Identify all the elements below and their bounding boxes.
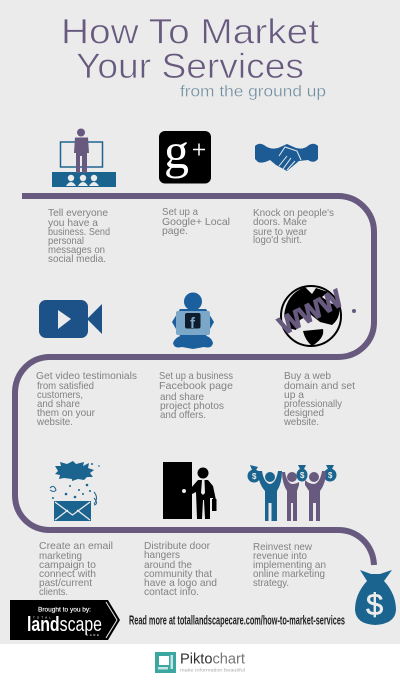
text: step 9 <box>253 542 326 589</box>
text: step 9: implementing an <box>253 560 326 571</box>
title: How To Market <box>61 12 319 52</box>
text: step 4: website. <box>36 417 73 428</box>
icon: three people with money bags: $ <box>252 472 257 481</box>
text: step 4: and share <box>37 399 80 410</box>
text: step 1: messages on <box>48 245 105 256</box>
text: step 6: professionally <box>284 399 343 410</box>
text: step 8: around the <box>144 560 192 571</box>
text: step 7 <box>39 541 113 598</box>
text: step 9: Reinvest new <box>253 542 312 553</box>
icon: email with burst <box>50 461 100 521</box>
text: step 3: Knock on people's <box>253 208 334 219</box>
text: step 7: Create an email <box>39 541 113 552</box>
text: step 6: website. <box>283 417 319 428</box>
text: step 4: from satisfied <box>37 381 94 392</box>
Piktochart logo: Piktochart <box>180 652 245 668</box>
icon: video camera <box>39 300 102 338</box>
text: step 2: Google+ Local <box>162 217 230 228</box>
text: step 5: and share <box>160 392 204 403</box>
icon: three people with money bags <box>248 465 336 521</box>
text: step 6 <box>283 371 355 428</box>
text: step 3: doors. Make <box>253 217 307 228</box>
text: step 6: designed <box>284 408 324 419</box>
text: step 4: them on your <box>37 408 96 419</box>
icon: three people with money bags: $ <box>328 471 333 480</box>
icon: Google+: g <box>164 123 189 179</box>
text: step 5: Set up a business <box>159 371 233 382</box>
text: step 4 <box>36 371 137 428</box>
text: step 7: clients. <box>39 587 68 598</box>
badge: brought to you by: Brought to you by: <box>38 606 91 614</box>
icon: presenter <box>52 128 116 187</box>
text: step 1: you have a <box>48 218 98 229</box>
text: step 6: domain and set <box>284 381 355 392</box>
text: step 8: Distribute door <box>144 541 211 552</box>
text: step 3: logo'd shirt. <box>253 235 302 246</box>
badge: brought to you by: landscape <box>27 614 102 636</box>
text: step 8: have a logo and <box>144 578 217 589</box>
icon: money bag <box>355 570 396 625</box>
badge: brought to you by: TOTAL <box>33 616 51 620</box>
icon: money bag: $ <box>366 587 383 622</box>
icon: three people with money bags: $ <box>300 471 305 480</box>
text: step 1: business. Send <box>48 227 110 238</box>
text: step 2: Set up a <box>162 207 198 218</box>
text: step 1 <box>48 208 110 265</box>
text: step 8: contact info. <box>144 587 199 598</box>
text: step 5: project photos <box>160 401 224 412</box>
text: step 7: campaign to <box>39 560 96 571</box>
text: step 5: Facebook page <box>159 381 233 392</box>
title: Your Services <box>76 47 304 86</box>
text: step 5 <box>159 371 233 421</box>
icon: Google+ <box>159 123 211 184</box>
winding path <box>15 196 374 565</box>
text: step 3: sure to wear <box>253 227 307 238</box>
text: step 4: customers, <box>37 390 83 401</box>
icon: person with laptop <box>172 292 214 349</box>
text: step 2: page. <box>162 226 188 237</box>
title <box>61 12 319 86</box>
text: step 9: revenue into <box>253 551 307 562</box>
text: step 7: past/current <box>39 578 92 589</box>
text: step 6: Buy a web <box>284 371 331 382</box>
text: step 5: and offers. <box>160 410 206 421</box>
icon: door and businessman <box>163 462 216 519</box>
text: step 8: community that <box>144 569 212 580</box>
subtitle: from the ground up <box>180 84 326 100</box>
icon: handshake <box>255 144 318 171</box>
text: step 4: Get video testimonials <box>36 371 137 382</box>
badge: brought to you by: CARE <box>86 633 99 637</box>
Piktochart logo: make information beautiful <box>180 668 245 672</box>
Piktochart logo <box>155 652 245 673</box>
badge: brought to you by <box>10 600 120 640</box>
icon: person with laptop: f <box>190 315 196 332</box>
text: step 9: strategy. <box>253 578 289 589</box>
icon: globe with www: WWW <box>274 284 348 340</box>
text: step 1: personal <box>48 236 84 247</box>
text: step 7: connect with <box>39 569 96 580</box>
text: step 8: hangers <box>144 550 180 561</box>
text: step 6: up a <box>284 390 304 401</box>
text: step 1: social media. <box>48 254 106 265</box>
text: step 3 <box>253 208 334 246</box>
text: step 8 <box>144 541 217 598</box>
text: step 7: marketing <box>39 551 82 562</box>
text: step 2 <box>162 207 230 237</box>
text: step 1: Tell everyone <box>48 208 108 219</box>
text: step 9: online marketing <box>253 569 325 580</box>
